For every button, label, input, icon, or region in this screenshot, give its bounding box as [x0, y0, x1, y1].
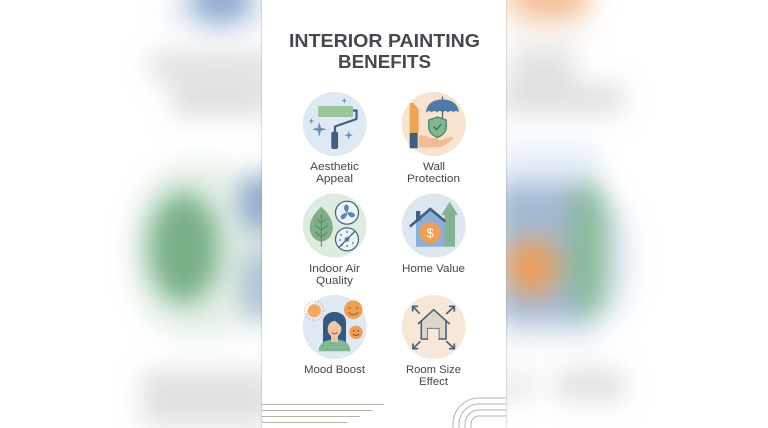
benefit: home value: [402, 194, 466, 275]
benefit: room size effect: [402, 295, 466, 388]
icon: house with expanding arrows: [402, 295, 466, 359]
icon: umbrella, shield and hand: [402, 92, 466, 156]
benefit: indoor air quality: [303, 194, 367, 287]
label: Wall Protection: Wall: [423, 161, 445, 173]
icon: leaf, fan and air filter: [303, 194, 367, 258]
label: Room Size Effect: Effect: [419, 376, 448, 388]
benefit: mood boost: [303, 295, 367, 376]
label: Aesthetic Appeal: [310, 161, 360, 185]
title: [289, 30, 480, 72]
label: Room Size Effect: [406, 364, 461, 388]
benefit: wall protection: [402, 92, 466, 185]
benefit: aesthetic appeal: [303, 92, 367, 185]
icon: house, dollar coin and rising arrow: $: [426, 226, 434, 240]
label: Aesthetic Appeal: Appeal: [316, 173, 353, 185]
label: Room Size Effect: Room Size: [406, 364, 461, 376]
title: INTERIOR PAINTING: [289, 30, 480, 51]
label: Indoor Air Quality: Indoor Air: [309, 263, 360, 275]
label: Indoor Air Quality: Quality: [316, 275, 354, 287]
label: Wall Protection: Protection: [407, 173, 460, 185]
label: Indoor Air Quality: [309, 263, 360, 287]
centre panel: [262, 0, 506, 428]
icon: paint roller: [303, 92, 367, 156]
icon: smiling woman, sun and smileys: [303, 295, 367, 359]
label: Mood Boost: Mood Boost: [304, 364, 365, 376]
label: Wall Protection: [407, 161, 460, 185]
label: Aesthetic Appeal: Aesthetic: [310, 161, 360, 173]
label: Home Value: Home Value: [402, 263, 465, 275]
title: BENEFITS: [338, 51, 431, 72]
